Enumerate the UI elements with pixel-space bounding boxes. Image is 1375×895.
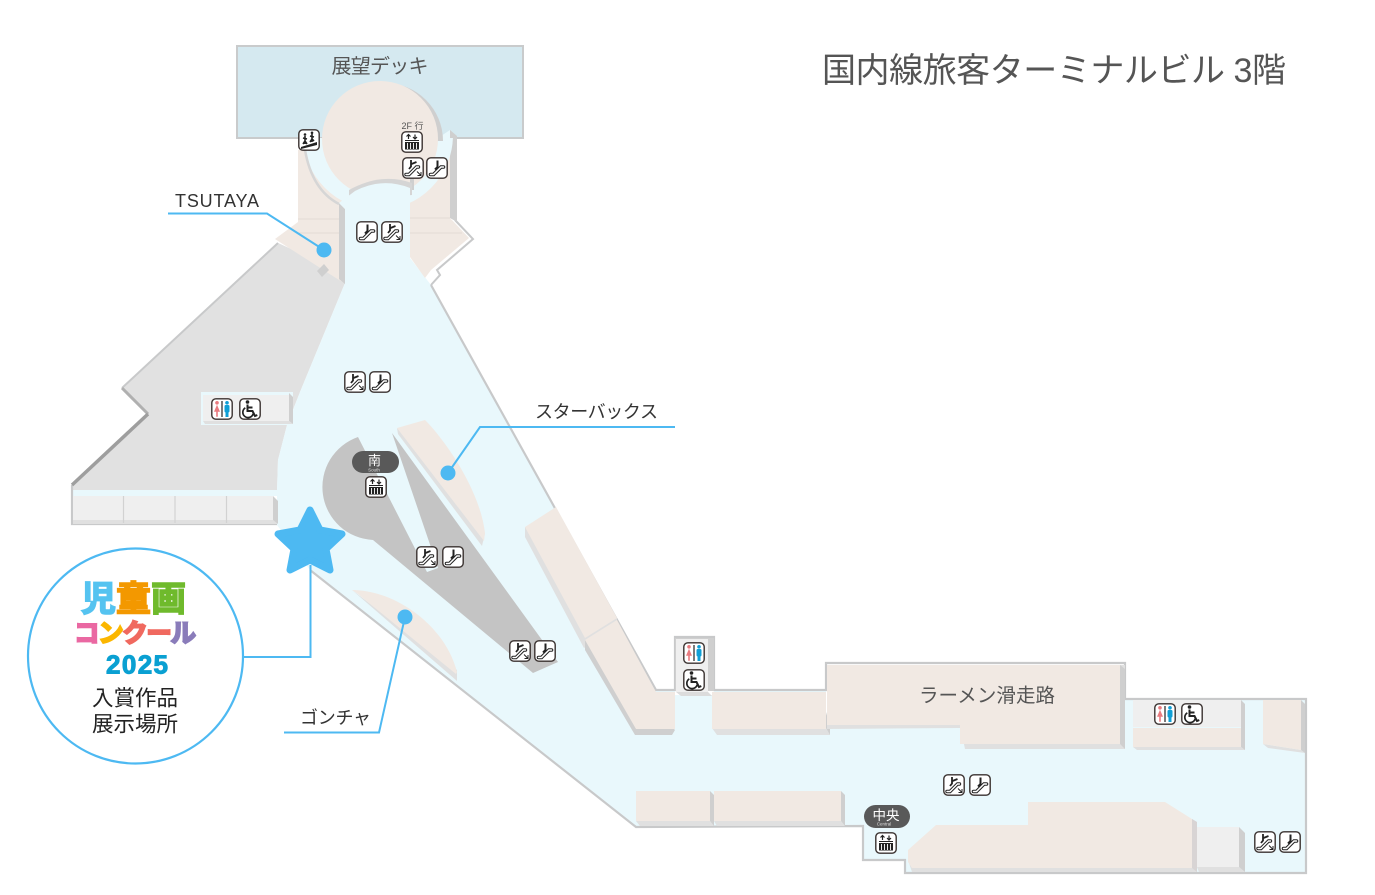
left restroom block — [201, 392, 293, 425]
panel: observation deck — [237, 46, 523, 138]
icon: escalators right — [1255, 832, 1275, 852]
callout: Starbucks: スターバックス — [535, 402, 658, 422]
arch shadow — [349, 179, 412, 200]
icon: escalators south lower — [510, 641, 530, 661]
icon: elevator 2F — [402, 132, 422, 152]
corridor arch — [339, 183, 410, 290]
circular store — [322, 81, 438, 197]
blue ring around circle — [306, 138, 453, 202]
store: Gong cha — [352, 590, 457, 681]
label: ramen runway: ラーメン滑走路 — [919, 685, 1055, 707]
store: right upper strip — [1133, 700, 1245, 750]
icon: central elevator — [876, 833, 896, 853]
badge: central: 中央 — [872, 808, 900, 823]
icon group: facilities — [212, 130, 1300, 853]
icon: escalators upper corridor — [357, 222, 377, 242]
store: lower right — [908, 802, 1197, 872]
left service rooms — [73, 496, 278, 524]
gray non-public area — [72, 243, 345, 492]
icon: escalators mid — [345, 372, 365, 392]
callout: Gong cha: ゴンチャ — [300, 708, 371, 728]
callout: TSUTAYA — [168, 191, 332, 258]
callout: TSUTAYA: TSUTAYA — [175, 191, 259, 211]
badge: central — [864, 805, 910, 828]
right upper store — [410, 145, 469, 278]
icon: south elevator — [366, 477, 386, 497]
store: right B — [585, 620, 675, 735]
icon: center accessible — [684, 670, 704, 690]
store: right corner — [1263, 700, 1305, 753]
exhibition text: 入賞作品 — [92, 686, 178, 710]
callout circle: exhibition: 展示場所 — [92, 712, 178, 736]
icon: left restroom — [212, 399, 232, 419]
badge: south: South — [368, 468, 380, 472]
icon: right accessible — [1182, 704, 1202, 724]
callout circle: exhibition — [28, 548, 243, 764]
badge: central: Central — [877, 822, 891, 826]
icon: escalators upper right — [403, 158, 423, 178]
store: Starbucks — [397, 420, 485, 546]
exhibition connector — [243, 565, 310, 657]
left upper store — [275, 150, 345, 283]
icon: escalators center — [944, 775, 964, 795]
atrium void — [322, 433, 558, 673]
icon: right restroom — [1155, 704, 1175, 724]
stores: lower left pair — [636, 791, 845, 826]
callout: Gong cha — [284, 610, 412, 732]
badge: south — [352, 451, 399, 473]
icon: stairs — [299, 130, 319, 150]
title: 国内線旅客ターミナルビル 3階 — [822, 52, 1286, 90]
badge: south: 南 — [368, 453, 381, 468]
label: observation deck: 展望デッキ — [332, 55, 428, 78]
main concourse floor — [72, 200, 1306, 873]
icon: center restroom — [684, 643, 704, 663]
store: center left — [712, 692, 830, 735]
icon: left accessible — [240, 399, 260, 419]
store: ramen runway — [827, 665, 1125, 749]
logo: title line 1: 児童画 — [81, 580, 186, 619]
logo: year: 2025 — [106, 650, 168, 680]
callout: Starbucks — [440, 402, 675, 480]
center restroom block — [675, 638, 714, 696]
icon: star marker — [278, 510, 342, 570]
circular store shadow — [405, 86, 443, 141]
label: 2F: 2F 行 — [401, 120, 424, 131]
service room lower right — [1197, 827, 1245, 872]
icon: escalators south — [417, 547, 437, 567]
walls — [72, 285, 1306, 873]
store: right A — [525, 507, 617, 648]
logo: title line 2: コンクール — [74, 620, 196, 648]
